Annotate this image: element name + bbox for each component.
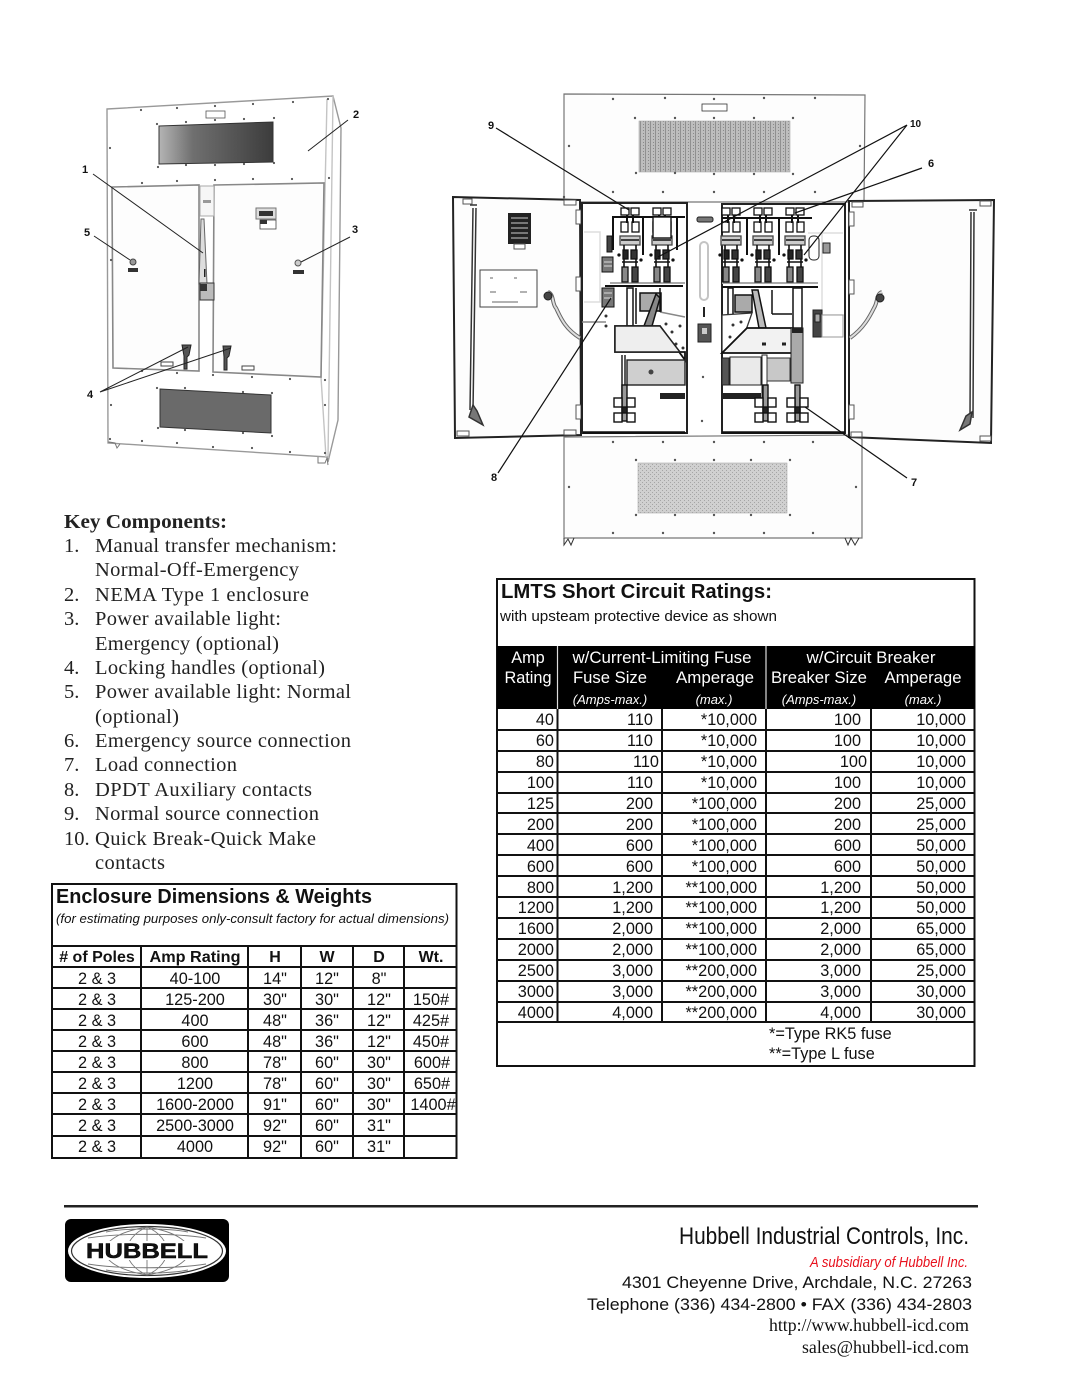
- row 800 A: [527, 879, 966, 897]
- item 7: 7.: [64, 754, 79, 776]
- row 40-100: 14": [263, 970, 287, 988]
- row 400: 425#: [413, 1012, 449, 1030]
- row 40 A: [536, 711, 966, 729]
- row 2500-3000: 92": [263, 1117, 287, 1135]
- company contact block: [587, 1223, 972, 1357]
- fuse type footnotes: *=Type RK5 fuse: [769, 1025, 892, 1043]
- row 1200: 650#: [414, 1075, 450, 1093]
- Hubbell logo: [65, 1219, 229, 1282]
- item 7: Load connection: [95, 754, 237, 776]
- row 1600 A: 1600: [518, 920, 554, 938]
- row 4000 A: **200,000: [685, 1004, 757, 1022]
- item 4: 4.: [64, 657, 79, 679]
- item 8: 8.: [64, 779, 79, 801]
- row 2500 A: [518, 962, 966, 980]
- row 40-100: 2 & 3: [78, 970, 116, 988]
- item 1: 1.: [64, 535, 79, 557]
- callout leader lines: [496, 125, 922, 478]
- row 800: 800: [181, 1054, 209, 1072]
- ratings table grid: [497, 709, 975, 1022]
- row 400: 2 & 3: [78, 1012, 116, 1030]
- row 1200: 78": [263, 1075, 287, 1093]
- row 200 A: [527, 816, 966, 834]
- callout numbers: 4: [87, 389, 94, 401]
- row 1600-2000: 2 & 3: [78, 1096, 116, 1114]
- subsidiary line: A subsidiary of Hubbell Inc.: [809, 1255, 968, 1271]
- enclosure column headers: W: [319, 949, 335, 966]
- row 60 A: 110: [627, 732, 653, 750]
- item 10: [64, 828, 316, 874]
- row 3000 A: [518, 983, 966, 1001]
- row 125 A: 125: [527, 795, 554, 813]
- row 125 A: *100,000: [692, 795, 757, 813]
- item 4: Locking handles (optional): [95, 657, 325, 679]
- ratings column headers: (Amps-max.): [573, 692, 647, 707]
- row 1600-2000: 30": [367, 1096, 391, 1114]
- row 2000 A: 2,000: [612, 941, 653, 959]
- enclosure column headers: H: [269, 949, 281, 966]
- row 1200: 1200: [177, 1075, 213, 1093]
- row 2000 A: [518, 941, 966, 959]
- door hinges: [457, 199, 991, 441]
- row 60 A: 10,000: [916, 732, 966, 750]
- item 1: Normal-Off-Emergency: [95, 559, 300, 581]
- row 200 A: 200: [527, 816, 554, 834]
- item 5: Power available light: Normal: [95, 681, 351, 703]
- row 600 A: *100,000: [692, 858, 757, 876]
- panel: enclosure dimensions and weights: [52, 884, 456, 1158]
- row 600: 450#: [413, 1033, 449, 1051]
- row 400: [78, 1012, 449, 1030]
- ratings column headers: w/Circuit Breaker: [805, 649, 936, 667]
- top vent: [639, 121, 790, 172]
- right door: [213, 183, 324, 377]
- row 100 A: [527, 774, 966, 792]
- row 1600 A: 2,000: [612, 920, 653, 938]
- row 100 A: 100: [834, 774, 861, 792]
- centre mechanism channel: [697, 217, 713, 342]
- item 3: 3.: [64, 608, 79, 630]
- callout numbers: 7: [911, 477, 917, 489]
- row 4000: 60": [315, 1138, 339, 1156]
- row 125-200: 30": [263, 991, 287, 1009]
- row 1200: 30": [367, 1075, 391, 1093]
- row 4000 A: 4,000: [612, 1004, 653, 1022]
- row 800 A: 1,200: [612, 879, 653, 897]
- pole contactors: [618, 208, 642, 282]
- row 600 A: [527, 858, 966, 876]
- bottom vent: [638, 463, 787, 513]
- footer rule: [64, 1205, 978, 1208]
- row 100 A: 10,000: [916, 774, 966, 792]
- operating links: [728, 288, 802, 328]
- item 5: [64, 681, 351, 728]
- bus bars: [722, 218, 818, 287]
- enclosure heading: Enclosure Dimensions & Weights: [56, 885, 372, 908]
- row 4000 A: 4,000: [820, 1004, 861, 1022]
- row 3000 A: **200,000: [685, 983, 757, 1001]
- row 2000 A: 65,000: [916, 941, 966, 959]
- row 400: 48": [263, 1012, 287, 1030]
- item 6: Emergency source connection: [95, 730, 351, 752]
- operating assembly: [615, 326, 685, 360]
- row 80 A: [536, 753, 966, 771]
- row 1200: 2 & 3: [78, 1075, 116, 1093]
- enclosure column headers: Amp Rating: [150, 949, 240, 966]
- row 800 A: 50,000: [916, 879, 966, 897]
- row 400: 36": [315, 1012, 339, 1030]
- mechanism bolts: [606, 316, 683, 348]
- row 125-200: [78, 991, 449, 1009]
- row 4000: [78, 1138, 391, 1156]
- row 3000 A: 3,000: [612, 983, 653, 1001]
- ratings column headers: Fuse Size: [573, 669, 647, 687]
- item 5: 5.: [64, 681, 79, 703]
- operating assembly: [722, 328, 793, 353]
- row 200 A: 200: [626, 816, 653, 834]
- enclosure column headers: Wt.: [419, 949, 443, 966]
- item 10: Quick Break-Quick Make: [95, 828, 316, 850]
- row 1200 A: 50,000: [916, 899, 966, 917]
- left door: [112, 185, 199, 371]
- row 800 A: 800: [527, 879, 554, 897]
- item 3: Emergency (optional): [95, 633, 279, 655]
- row 60 A: 100: [834, 732, 861, 750]
- item 8: DPDT Auxiliary contacts: [95, 779, 312, 801]
- coil: [627, 360, 685, 385]
- callout numbers: 9: [488, 120, 494, 132]
- feet: [564, 538, 859, 545]
- website: http://www.hubbell-icd.com: [769, 1315, 969, 1335]
- bus bars: [605, 217, 685, 286]
- enclosure front view illustration: [82, 96, 359, 465]
- item 1: [64, 535, 337, 581]
- callout numbers: 6: [928, 158, 934, 170]
- row 125-200: 150#: [413, 991, 449, 1009]
- panel: LMTS short circuit ratings: [497, 579, 975, 1066]
- row 600: 12": [367, 1033, 391, 1051]
- locking handles: [161, 345, 254, 370]
- row 200 A: 25,000: [916, 816, 966, 834]
- row 40-100: 40-100: [170, 970, 220, 988]
- coil: [722, 358, 729, 385]
- row 1600-2000: 1600-2000: [156, 1096, 234, 1114]
- callout numbers: 10: [910, 119, 922, 130]
- ratings column headers: Amperage: [676, 669, 754, 687]
- bottom panel: [564, 435, 862, 538]
- row 80 A: 80: [536, 753, 554, 771]
- row 125 A: [527, 795, 966, 813]
- callout numbers: [488, 119, 934, 489]
- row 600 A: 600: [527, 858, 554, 876]
- top vent: [159, 122, 273, 164]
- ratings heading: LMTS Short Circuit Ratings:: [501, 581, 772, 603]
- email: sales@hubbell-icd.com: [802, 1337, 969, 1357]
- company name: Hubbell Industrial Controls, Inc.: [679, 1223, 969, 1250]
- row 600: 2 & 3: [78, 1033, 116, 1051]
- item 5: (optional): [95, 706, 179, 728]
- callout numbers: [82, 109, 359, 401]
- item 1: Manual transfer mechanism:: [95, 535, 337, 557]
- ratings column headers: [497, 646, 975, 709]
- enclosure column headers: D: [373, 949, 385, 966]
- row 1600-2000: 91": [263, 1096, 287, 1114]
- ratings column headers: (Amps-max.): [782, 692, 856, 707]
- item 2: NEMA Type 1 enclosure: [95, 584, 309, 606]
- row 1600 A: [518, 920, 966, 938]
- row 4000: 92": [263, 1138, 287, 1156]
- row 2500-3000: 2500-3000: [156, 1117, 234, 1135]
- row 40 A: 110: [627, 711, 653, 729]
- enclosure body: [107, 96, 341, 462]
- row 600: [78, 1033, 449, 1051]
- row 2500-3000: 31": [367, 1117, 391, 1135]
- bolts: [110, 99, 329, 453]
- row 40-100: 12": [315, 970, 339, 988]
- row 400 A: *100,000: [692, 837, 757, 855]
- row 1600-2000: 60": [315, 1096, 339, 1114]
- row 2000 A: 2000: [518, 941, 554, 959]
- row 3000 A: 3000: [518, 983, 554, 1001]
- row 800: 2 & 3: [78, 1054, 116, 1072]
- enclosure column headers: # of Poles: [59, 949, 135, 966]
- row 600 A: 50,000: [916, 858, 966, 876]
- row 80 A: *10,000: [701, 753, 757, 771]
- row 1200 A: 1200: [518, 899, 554, 917]
- bolts: [564, 98, 860, 533]
- left door: [453, 197, 581, 438]
- row 800: 60": [315, 1054, 339, 1072]
- row 60 A: 60: [536, 732, 554, 750]
- door cable assemblies: [544, 292, 884, 338]
- row 1600 A: **100,000: [685, 920, 757, 938]
- row 600: 600: [181, 1033, 209, 1051]
- item 2: 2.: [64, 584, 79, 606]
- item 10: 10.: [64, 828, 90, 850]
- row 60 A: [536, 732, 966, 750]
- row 80 A: 10,000: [916, 753, 966, 771]
- row 2500 A: 3,000: [820, 962, 861, 980]
- row 800: 78": [263, 1054, 287, 1072]
- Hubbell door label: [256, 208, 276, 229]
- row 1600-2000: 1400#: [410, 1096, 456, 1114]
- row 40 A: 40: [536, 711, 554, 729]
- right compartment: [719, 204, 845, 433]
- row 800: 600#: [414, 1054, 450, 1072]
- row 4000 A: 4000: [518, 1004, 554, 1022]
- item 9: 9.: [64, 803, 79, 825]
- key components heading: Key Components:: [64, 511, 227, 533]
- row 800: [78, 1054, 450, 1072]
- row 2500-3000: [78, 1117, 391, 1135]
- row 600: 36": [315, 1033, 339, 1051]
- row 800 A: 1,200: [820, 879, 861, 897]
- enclosure subheading: (for estimating purposes only-consult factory for actual dimensions): [56, 911, 449, 926]
- enclosure column headers: [59, 949, 443, 966]
- enclosure open view illustration: [453, 94, 994, 545]
- row 400 A: [527, 837, 966, 855]
- row 1200: 60": [315, 1075, 339, 1093]
- row 40 A: *10,000: [701, 711, 757, 729]
- row 600 A: 600: [834, 858, 861, 876]
- item 9: Normal source connection: [95, 803, 319, 825]
- row 2000 A: 2,000: [820, 941, 861, 959]
- ratings column headers: Breaker Size: [771, 669, 867, 687]
- callout leader lines: [93, 120, 350, 392]
- row 40 A: 10,000: [916, 711, 966, 729]
- row 80 A: 100: [840, 753, 867, 771]
- door rods and latches: [469, 205, 977, 430]
- row 40 A: 100: [834, 711, 861, 729]
- ratings subheading: with upsteam protective device as shown: [499, 608, 777, 625]
- callout numbers: 1: [82, 164, 88, 176]
- fuse type footnotes: [769, 1025, 892, 1063]
- row 200 A: *100,000: [692, 816, 757, 834]
- table grid: [52, 884, 456, 1158]
- row 125 A: 25,000: [916, 795, 966, 813]
- row 100 A: *10,000: [701, 774, 757, 792]
- ratings column headers: (max.): [696, 692, 732, 707]
- row 800 A: **100,000: [685, 879, 757, 897]
- callout numbers: 2: [353, 109, 359, 121]
- hinged plate: [722, 313, 752, 353]
- table outline: [497, 579, 974, 1066]
- row 3000 A: 30,000: [916, 983, 966, 1001]
- enclosure feet: [109, 442, 328, 465]
- row 600 A: 600: [626, 858, 653, 876]
- row 1600 A: 65,000: [916, 920, 966, 938]
- row 4000: 31": [367, 1138, 391, 1156]
- row 1200 A: 1,200: [820, 899, 861, 917]
- power available lights: [128, 259, 304, 274]
- operating links: [627, 288, 661, 326]
- nameplate: [702, 104, 727, 111]
- row 1200 A: 1,200: [612, 899, 653, 917]
- item 6: 6.: [64, 730, 79, 752]
- row 1200 A: **100,000: [685, 899, 757, 917]
- callout numbers: 5: [84, 227, 90, 239]
- row 1200: [78, 1075, 450, 1093]
- ratings column headers: Rating: [504, 669, 552, 687]
- row 125 A: 200: [626, 795, 653, 813]
- item 10: contacts: [95, 852, 165, 874]
- ratings column headers: Amp: [511, 649, 545, 667]
- address: 4301 Cheyenne Drive, Archdale, N.C. 27263: [622, 1273, 972, 1292]
- row 100 A: 110: [627, 774, 653, 792]
- door instruction sheet: [480, 270, 537, 307]
- row 2500-3000: 60": [315, 1117, 339, 1135]
- enclosure table rows: [78, 970, 456, 1156]
- telephone and fax: Telephone (336) 434-2800 • FAX (336) 434-2803: [587, 1295, 972, 1314]
- ratings column headers: w/Current-Limiting Fuse: [571, 649, 752, 667]
- ratings table rows: [518, 711, 966, 1022]
- left compartment: [582, 203, 687, 433]
- row 125-200: 125-200: [165, 991, 225, 1009]
- item 3: [64, 608, 281, 655]
- row 4000: 2 & 3: [78, 1138, 116, 1156]
- row 100 A: 100: [527, 774, 554, 792]
- row 2500 A: 25,000: [916, 962, 966, 980]
- row 60 A: *10,000: [701, 732, 757, 750]
- row 2500 A: 3,000: [612, 962, 653, 980]
- row 2500 A: **200,000: [685, 962, 757, 980]
- transfer mechanism handle: [199, 186, 214, 300]
- row 200 A: 200: [834, 816, 861, 834]
- row 40-100: 8": [372, 970, 387, 988]
- row 400 A: 600: [626, 837, 653, 855]
- key components list: [64, 511, 351, 874]
- row 4000 A: [518, 1004, 966, 1022]
- fuse type footnotes: **=Type L fuse: [769, 1045, 875, 1063]
- row 400 A: 50,000: [916, 837, 966, 855]
- pole contactors: [719, 208, 743, 282]
- row 800: 30": [367, 1054, 391, 1072]
- row 4000 A: 30,000: [916, 1004, 966, 1022]
- row 2000 A: **100,000: [685, 941, 757, 959]
- Hubbell logo: HUBBELL: [86, 1240, 208, 1263]
- row 400 A: 600: [834, 837, 861, 855]
- row 125 A: 200: [834, 795, 861, 813]
- bottom vent: [160, 389, 271, 433]
- right door: [849, 200, 994, 443]
- row 80 A: 110: [633, 753, 659, 771]
- row 400: 400: [181, 1012, 209, 1030]
- ratings column headers: Amperage: [884, 669, 962, 687]
- auxiliary contact stack: [602, 236, 614, 307]
- nameplate: [206, 111, 225, 118]
- row 1200 A: [518, 899, 966, 917]
- row 400: 12": [367, 1012, 391, 1030]
- ratings column headers: (max.): [905, 692, 941, 707]
- row 40-100: [78, 970, 387, 988]
- callout numbers: 3: [352, 224, 358, 236]
- row 2500 A: 2500: [518, 962, 554, 980]
- row 1600 A: 2,000: [820, 920, 861, 938]
- row 125-200: 30": [315, 991, 339, 1009]
- row 4000: 4000: [177, 1138, 213, 1156]
- door label plate: [508, 213, 531, 249]
- top panel: [564, 94, 865, 202]
- callout numbers: 8: [491, 472, 497, 484]
- row 3000 A: 3,000: [820, 983, 861, 1001]
- row 2500-3000: 2 & 3: [78, 1117, 116, 1135]
- item 3: Power available light:: [95, 608, 281, 630]
- row 125-200: 2 & 3: [78, 991, 116, 1009]
- row 1600-2000: [78, 1096, 456, 1114]
- row 400 A: 400: [527, 837, 554, 855]
- row 600: 48": [263, 1033, 287, 1051]
- side components: [809, 236, 843, 337]
- row 125-200: 12": [367, 991, 391, 1009]
